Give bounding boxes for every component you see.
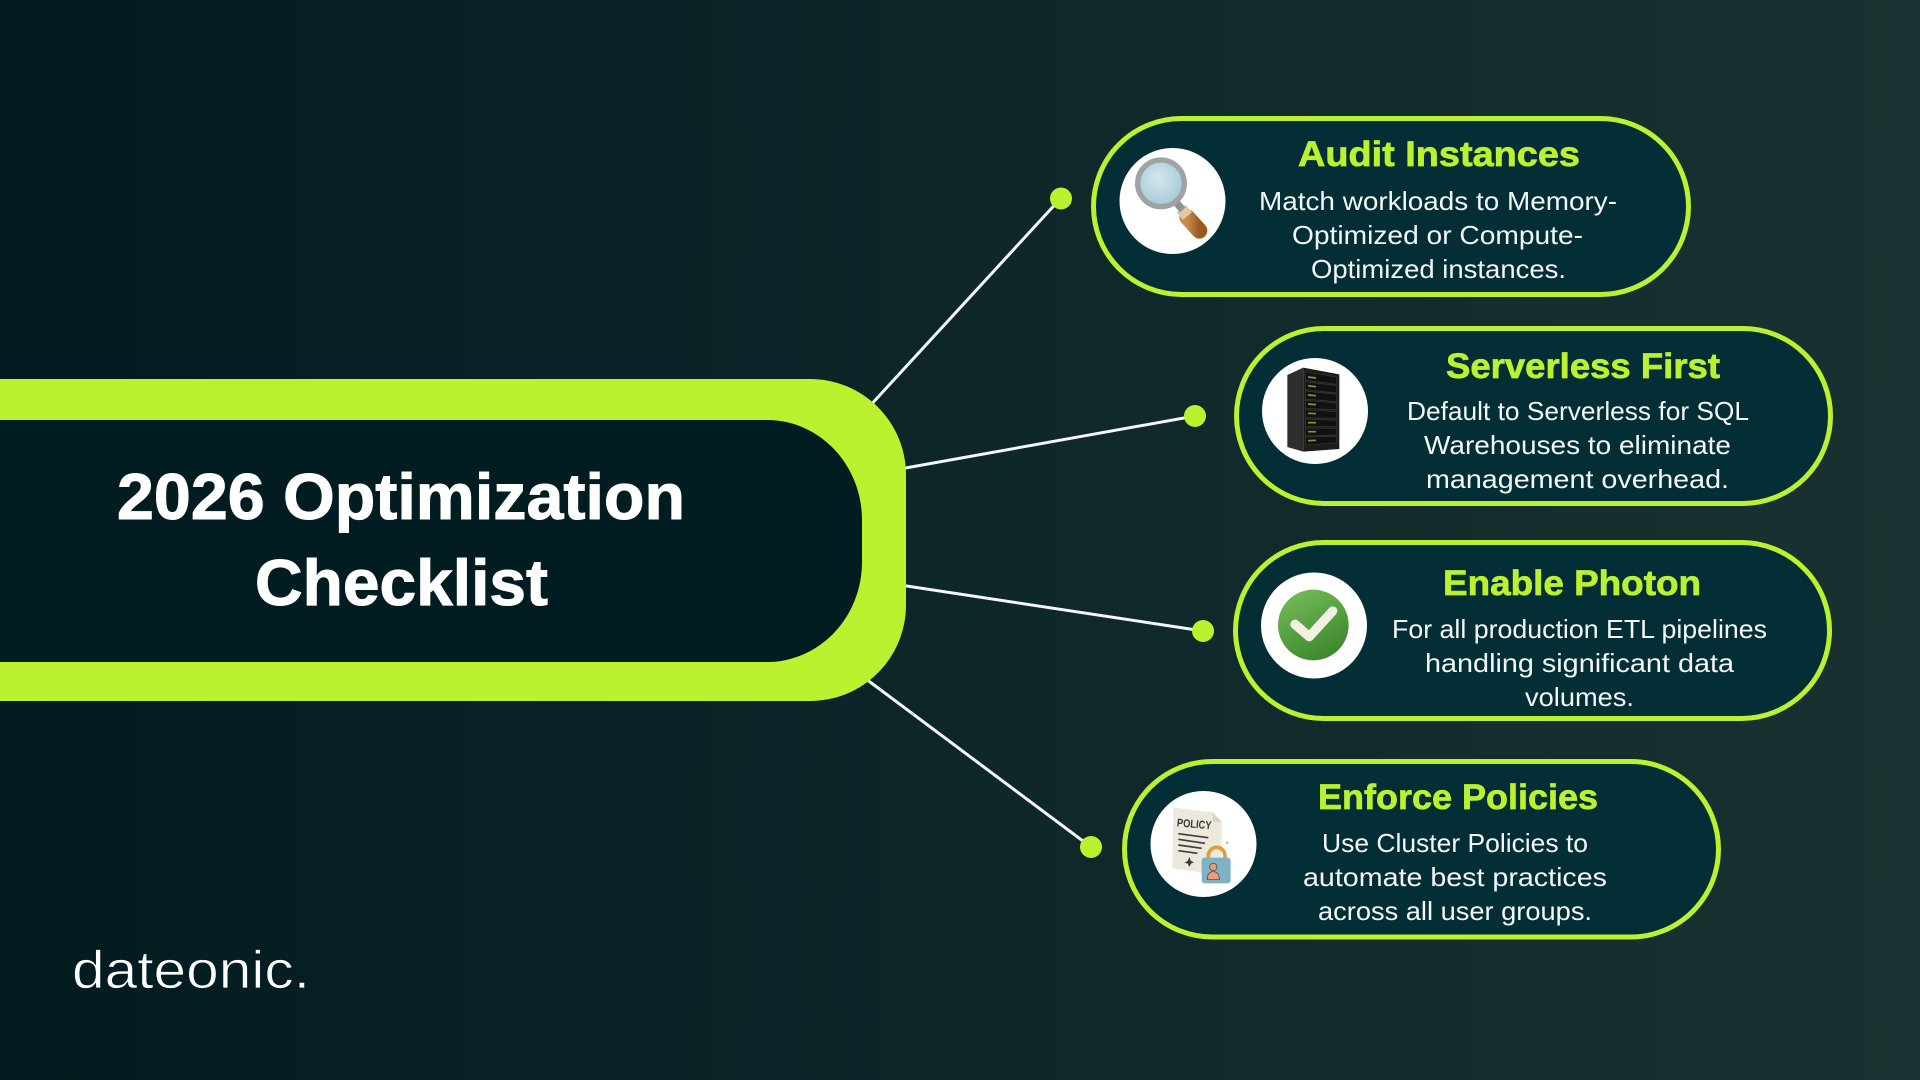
description: Default to Serverless for SQL: [1407, 396, 1749, 426]
description: volumes.: [1525, 682, 1634, 712]
panel: serverless first: [1236, 328, 1830, 504]
description: Use Cluster Policies to: [1322, 828, 1588, 858]
description: [1303, 828, 1607, 926]
description: Warehouses to eliminate: [1424, 430, 1731, 460]
connector lines: [862, 198, 1203, 847]
description: Optimized or Compute-: [1292, 220, 1583, 250]
panel outer lime frame: [0, 379, 906, 701]
icon: magnifying glass: [1120, 148, 1226, 254]
heading: Serverless First: [1446, 347, 1720, 386]
description: Match workloads to Memory-: [1259, 186, 1617, 216]
description: automate best practices: [1303, 862, 1607, 892]
description: Optimized instances.: [1311, 254, 1566, 284]
card pill: [1236, 328, 1830, 504]
icon: green check: [1261, 572, 1367, 678]
connector dots: [1050, 188, 1214, 858]
panel inner dark fill: [0, 420, 862, 662]
description: management overhead.: [1426, 464, 1729, 494]
panel: enforce policies: [1124, 762, 1718, 937]
description: [1407, 396, 1749, 494]
icon: server rack: [1262, 358, 1368, 464]
description: [1392, 614, 1767, 712]
description: For all production ETL pipelines: [1392, 614, 1767, 644]
card pill: [1094, 118, 1688, 294]
icon: policy document with lock: POLICY: [1176, 817, 1212, 832]
description: across all user groups.: [1318, 896, 1592, 926]
panel: enable photon: [1236, 542, 1830, 718]
description: handling significant data: [1425, 648, 1735, 678]
card pill: [1236, 542, 1830, 718]
heading: Enforce Policies: [1318, 778, 1598, 817]
logo: dateonic.: [72, 941, 310, 1000]
description: [1259, 186, 1617, 284]
title: [117, 460, 685, 619]
central title panel: [0, 379, 906, 701]
heading: Audit Instances: [1298, 135, 1580, 174]
icon: policy document with lock: [1150, 791, 1256, 897]
panel: audit instances: [1094, 118, 1688, 294]
heading: Enable Photon: [1443, 564, 1701, 603]
title: Checklist: [255, 546, 548, 619]
title: 2026 Optimization: [117, 460, 685, 533]
card pill: [1124, 762, 1718, 937]
